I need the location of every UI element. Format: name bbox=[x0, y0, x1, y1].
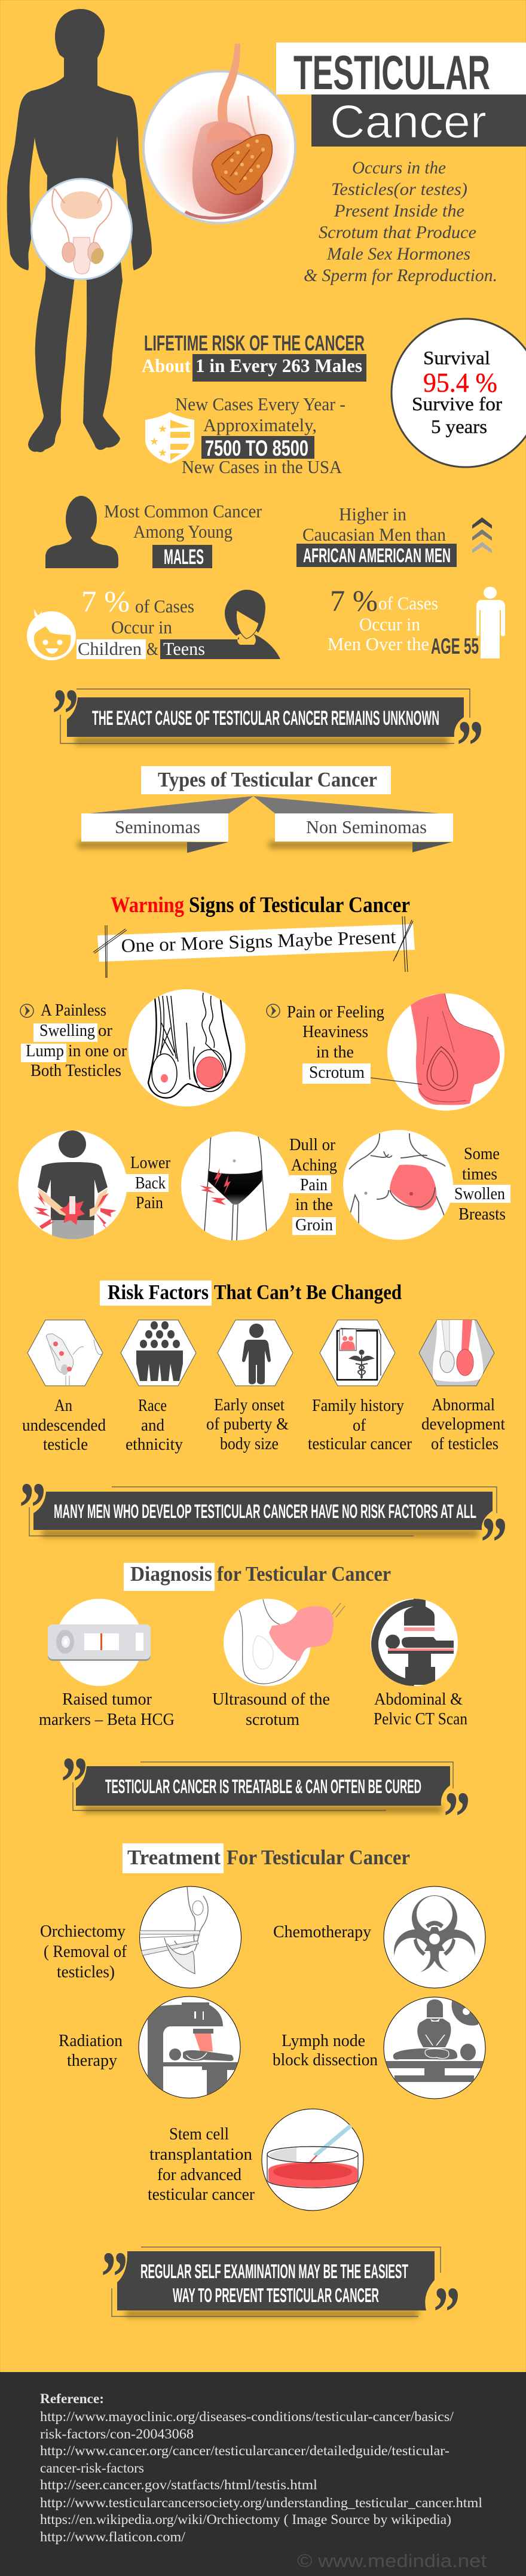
new cases block: New Cases Every Year - bbox=[175, 394, 345, 414]
new cases block: Approximately, bbox=[203, 414, 317, 435]
hexagon captions bbox=[22, 1395, 505, 1454]
text: 7 percent children and teens: & bbox=[146, 638, 158, 659]
icon: child face bbox=[27, 609, 76, 660]
diagnosis captions bbox=[39, 1690, 467, 1729]
new cases block: 7500 TO 8500 bbox=[205, 436, 308, 461]
survival circle: 5 years bbox=[431, 416, 487, 437]
heading: diagnosis: for Testicular Cancer bbox=[217, 1562, 391, 1586]
sign: scrotum pain text bbox=[267, 1002, 422, 1084]
footer: references: risk-factors/con-20043068 bbox=[40, 2426, 194, 2441]
tilted banner: one or more signs bbox=[93, 916, 415, 978]
text: 7 percent children and teens: Children bbox=[78, 638, 142, 659]
hexagon captions: Abnormal bbox=[432, 1395, 495, 1414]
sign: painless swelling text: Both Testicles bbox=[30, 1061, 121, 1080]
sign: scrotum pain illustration bbox=[387, 993, 504, 1111]
heading: risk factors: That Can’t Be Changed bbox=[214, 1281, 402, 1304]
heading: treatment: Treatment bbox=[127, 1846, 221, 1869]
title: Cancer bbox=[311, 94, 526, 148]
text: most common cancer bbox=[104, 501, 262, 569]
icon: USA shield: ★ bbox=[158, 447, 167, 459]
quote banner: exact cause unknown bbox=[52, 675, 484, 786]
hexagon captions: body size bbox=[220, 1434, 279, 1453]
sign: painless swelling illustration bbox=[128, 989, 245, 1106]
icon: white man figure bbox=[476, 587, 505, 659]
intro text: & Sperm for Reproduction. bbox=[304, 266, 497, 285]
sign: swollen breasts text: Some bbox=[464, 1144, 500, 1163]
quote banner: self examination: ” bbox=[101, 2237, 128, 2318]
text: 7 percent men over 55 bbox=[328, 584, 479, 659]
sign: painless swelling text: A Painless bbox=[41, 1001, 106, 1020]
text: 7 percent children and teens: 7 % bbox=[81, 584, 130, 618]
footer: references: http://www.mayoclinic.org/diseases-conditions/testicular-cancer/basics/ bbox=[40, 2409, 454, 2424]
diagnosis captions: markers – Beta HCG bbox=[39, 1710, 175, 1729]
hexagon: person body size bbox=[218, 1320, 293, 1386]
treatment: stem cell text: transplantation bbox=[149, 2145, 252, 2164]
treatment: orchiectomy text bbox=[40, 1922, 127, 1981]
footer: references: cancer-risk-factors bbox=[40, 2461, 144, 2476]
quote banner: treatable: ” bbox=[444, 1778, 470, 1858]
new cases block: New Cases in the USA bbox=[182, 456, 342, 477]
text: 7 percent men over 55: AGE 55 bbox=[431, 634, 479, 659]
quote banner: treatable: ” bbox=[61, 1743, 88, 1823]
quote banner: exact cause unknown: ” bbox=[52, 675, 79, 755]
heading: diagnosis bbox=[124, 1562, 391, 1591]
tilted banner: one or more signs: One or More Signs Maybe Present bbox=[121, 926, 396, 956]
text: 7 percent men over 55: Men Over the bbox=[328, 633, 429, 654]
heading: risk factors bbox=[100, 1281, 402, 1306]
sign: swollen breasts text bbox=[449, 1144, 510, 1224]
treatment: orchiectomy illustration bbox=[140, 1886, 241, 1988]
diagnosis: CT scanner bbox=[371, 1599, 458, 1686]
quote banner: self examination: ” bbox=[433, 2273, 460, 2353]
icon: young male bust bbox=[45, 496, 118, 568]
hexagon captions: ethnicity bbox=[126, 1435, 183, 1454]
diagnosis captions: Raised tumor bbox=[62, 1690, 152, 1709]
sign: swollen breasts text: times bbox=[462, 1164, 497, 1184]
footer: references: http://www.flaticon.com/ bbox=[40, 2529, 186, 2544]
diagnosis captions: Pelvic CT Scan bbox=[374, 1709, 467, 1728]
title: Cancer: Cancer bbox=[330, 95, 487, 148]
hexagon: undescended testicle bbox=[27, 1320, 103, 1386]
footer: references bbox=[0, 2372, 526, 2576]
sign: groin pain text: Aching bbox=[291, 1156, 337, 1175]
survival circle: Survival bbox=[423, 347, 490, 368]
male body silhouette bbox=[7, 9, 152, 452]
icon: up chevrons bbox=[472, 517, 492, 553]
treatment: stem cell text: for advanced bbox=[157, 2165, 241, 2184]
quote banner: no risk factors: ” bbox=[19, 1468, 46, 1548]
sign: lower back pain text: Pain bbox=[136, 1193, 163, 1212]
sign: swollen breasts text: Breasts bbox=[458, 1205, 506, 1224]
icon: USA shield: ★ bbox=[149, 435, 159, 448]
ribbon: seminomas bbox=[78, 813, 228, 853]
treatment: stem cell text: Stem cell bbox=[169, 2124, 229, 2144]
sign: swollen breasts illustration bbox=[343, 1130, 453, 1240]
text: 7 percent men over 55: 7 % bbox=[330, 584, 378, 617]
heading: types of testicular cancer: Types of Testicular Cancer bbox=[158, 768, 377, 791]
diagnosis captions: Abdominal & bbox=[374, 1690, 463, 1709]
footer: references: http://www.cancer.org/cancer/testicularcancer/detailedguide/testicular- bbox=[40, 2443, 449, 2458]
ribbon: non seminomas: Non Seminomas bbox=[306, 816, 427, 837]
hexagon captions: and bbox=[141, 1416, 164, 1435]
hexagon captions: undescended bbox=[22, 1416, 106, 1435]
sign: painless swelling text bbox=[20, 1001, 127, 1080]
sign: painless swelling text: or bbox=[98, 1021, 112, 1040]
new cases block bbox=[175, 394, 345, 477]
hexagon captions: development bbox=[421, 1414, 505, 1434]
sign: groin pain illustration bbox=[181, 1132, 290, 1241]
hexagon captions: of puberty & bbox=[206, 1414, 289, 1434]
sign: scrotum pain text: in the bbox=[316, 1042, 354, 1062]
heading: warning signs bbox=[111, 893, 410, 917]
lifetime risk block: About bbox=[142, 355, 191, 376]
text: higher in Caucasian men bbox=[296, 504, 457, 567]
quote banner: treatable bbox=[61, 1743, 470, 1858]
sign: groin pain text: Dull or bbox=[289, 1135, 335, 1154]
hexagon: family history file bbox=[320, 1320, 395, 1386]
hexagon: race and ethnicity crowd bbox=[121, 1320, 196, 1386]
intro text bbox=[304, 158, 497, 285]
treatment: stem cell petri dish bbox=[262, 2109, 363, 2211]
treatment: lymph node text: Lymph node bbox=[282, 2031, 365, 2050]
diagnosis captions: Ultrasound of the bbox=[212, 1690, 330, 1709]
sign: painless swelling text: Swelling bbox=[39, 1021, 95, 1040]
hexagon captions: Family history bbox=[312, 1396, 404, 1415]
heading: treatment bbox=[123, 1843, 410, 1873]
lifetime risk block: 1 in Every 263 Males bbox=[195, 355, 362, 376]
lifetime risk block: LIFETIME RISK OF THE CANCER bbox=[144, 331, 365, 355]
treatment: radiation machine bbox=[139, 1996, 240, 2100]
ribbon: seminomas: Seminomas bbox=[115, 816, 200, 837]
survival circle: 95.4 % bbox=[423, 367, 497, 398]
quote banner: self examination bbox=[101, 2237, 460, 2353]
intro text: Scrotum that Produce bbox=[319, 222, 476, 242]
lifetime risk block bbox=[142, 331, 366, 382]
intro text: Present Inside the bbox=[334, 201, 464, 221]
sign: groin pain text: Pain bbox=[300, 1175, 328, 1194]
treatment: chemotherapy biohazard bbox=[384, 1886, 485, 1988]
heading: treatment: For Testicular Cancer bbox=[227, 1846, 410, 1869]
sign: scrotum pain text: Pain or Feeling bbox=[287, 1002, 384, 1022]
text: higher in Caucasian men: Higher in bbox=[339, 504, 406, 525]
sign: lower back pain text: Lower bbox=[130, 1153, 170, 1172]
treatment: radiation text: Radiation bbox=[59, 2031, 123, 2050]
heading: warning signs: Signs of Testicular Cancer bbox=[189, 893, 410, 917]
text: 7 percent men over 55: of Cases bbox=[378, 593, 438, 614]
sign: lower back pain text: Back bbox=[135, 1173, 166, 1193]
footer: references: http://www.testicularcancersociety.org/understanding_testicular_cancer.html bbox=[40, 2495, 482, 2510]
sign: groin pain text: in the bbox=[295, 1195, 333, 1214]
hexagon captions: testicular cancer bbox=[308, 1434, 412, 1453]
hexagon: abnormal development of testicles bbox=[419, 1316, 494, 1386]
watermark: © www.medindia.net bbox=[297, 2550, 487, 2571]
heading: warning signs: Warning bbox=[111, 893, 184, 917]
hexagon captions: Early onset bbox=[214, 1395, 285, 1414]
hexagon captions: An bbox=[54, 1396, 72, 1415]
intro text: Testicles(or testes) bbox=[331, 179, 467, 199]
ribbon: non seminomas bbox=[269, 813, 453, 852]
hexagon captions: of bbox=[353, 1416, 366, 1435]
sign: lower back pain text bbox=[126, 1153, 170, 1212]
text: higher in Caucasian men: Caucasian Men than bbox=[302, 524, 446, 545]
text: 7 percent children and teens: Teens bbox=[163, 638, 205, 659]
treatment: stem cell text bbox=[148, 2124, 255, 2204]
treatment: orchiectomy text: ( Removal of bbox=[44, 1942, 127, 1961]
quote banner: no risk factors bbox=[19, 1468, 507, 1583]
icon: teen with dark hair bbox=[160, 590, 280, 659]
sign: scrotum pain text: Scrotum bbox=[309, 1063, 365, 1082]
diagnosis: tumor marker test strip bbox=[48, 1599, 151, 1686]
magnified circle: testicle with tumor bbox=[143, 44, 295, 223]
connector ribbons bbox=[89, 796, 439, 813]
diagnosis captions: scrotum bbox=[246, 1710, 299, 1729]
treatment: orchiectomy text: testicles) bbox=[57, 1962, 115, 1981]
sign: lower back pain illustration bbox=[18, 1130, 127, 1239]
intro text: Male Sex Hormones bbox=[326, 244, 470, 264]
footer: references: http://seer.cancer.gov/statfacts/html/testis.html bbox=[40, 2477, 317, 2492]
text: most common cancer: Among Young bbox=[133, 521, 233, 542]
survival circle: Survive for bbox=[412, 393, 502, 414]
text: most common cancer: Most Common Cancer bbox=[104, 501, 262, 522]
sign: scrotum pain text: Heaviness bbox=[302, 1022, 368, 1041]
treatment: lymph node surgery bbox=[384, 1997, 485, 2099]
text: 7 percent children and teens: Occur in bbox=[111, 617, 172, 638]
text: most common cancer: MALES bbox=[164, 545, 204, 569]
quote banner: exact cause unknown: ” bbox=[457, 706, 484, 786]
sign: swollen breasts text: Swollen bbox=[454, 1184, 505, 1203]
footer: references: https://en.wikipedia.org/wiki/Orchiectomy ( Image Source by wikipedia) bbox=[40, 2512, 451, 2527]
treatment: radiation text bbox=[59, 2031, 123, 2070]
inset circle: male reproductive anatomy bbox=[31, 179, 132, 279]
text: 7 percent children and teens: of Cases bbox=[135, 596, 194, 617]
sign: painless swelling text: Lump bbox=[26, 1041, 64, 1060]
hexagon captions: of testicles bbox=[431, 1434, 499, 1453]
diagnosis: ultrasound scrotum bbox=[224, 1599, 345, 1686]
hexagon captions: Race bbox=[138, 1396, 167, 1415]
text: 7 percent men over 55: Occur in bbox=[359, 614, 420, 635]
icon: USA shield: ★ bbox=[158, 423, 167, 435]
survival circle bbox=[392, 319, 526, 467]
text: 7 percent children and teens bbox=[77, 584, 205, 659]
treatment: stem cell text: testicular cancer bbox=[148, 2185, 255, 2204]
treatment: orchiectomy text: Orchiectomy bbox=[40, 1922, 126, 1941]
heading: diagnosis: Diagnosis bbox=[130, 1562, 212, 1586]
heading: risk factors: Risk Factors bbox=[108, 1281, 209, 1304]
footer: references: Reference: bbox=[40, 2391, 104, 2406]
treatment: lymph node text bbox=[273, 2031, 378, 2069]
hexagon captions: testicle bbox=[43, 1435, 88, 1454]
treatment: lymph node text: block dissection bbox=[273, 2050, 378, 2069]
sign: painless swelling text: in one or bbox=[68, 1041, 127, 1060]
icon: USA shield bbox=[145, 412, 194, 464]
intro text: Occurs in the bbox=[352, 158, 446, 178]
quote banner: no risk factors: ” bbox=[481, 1503, 507, 1583]
treatment: chemotherapy text: Chemotherapy bbox=[273, 1922, 371, 1941]
sign: groin pain text: Groin bbox=[295, 1215, 333, 1234]
sign: groin pain text bbox=[289, 1135, 337, 1235]
treatment: radiation text: therapy bbox=[67, 2051, 117, 2070]
